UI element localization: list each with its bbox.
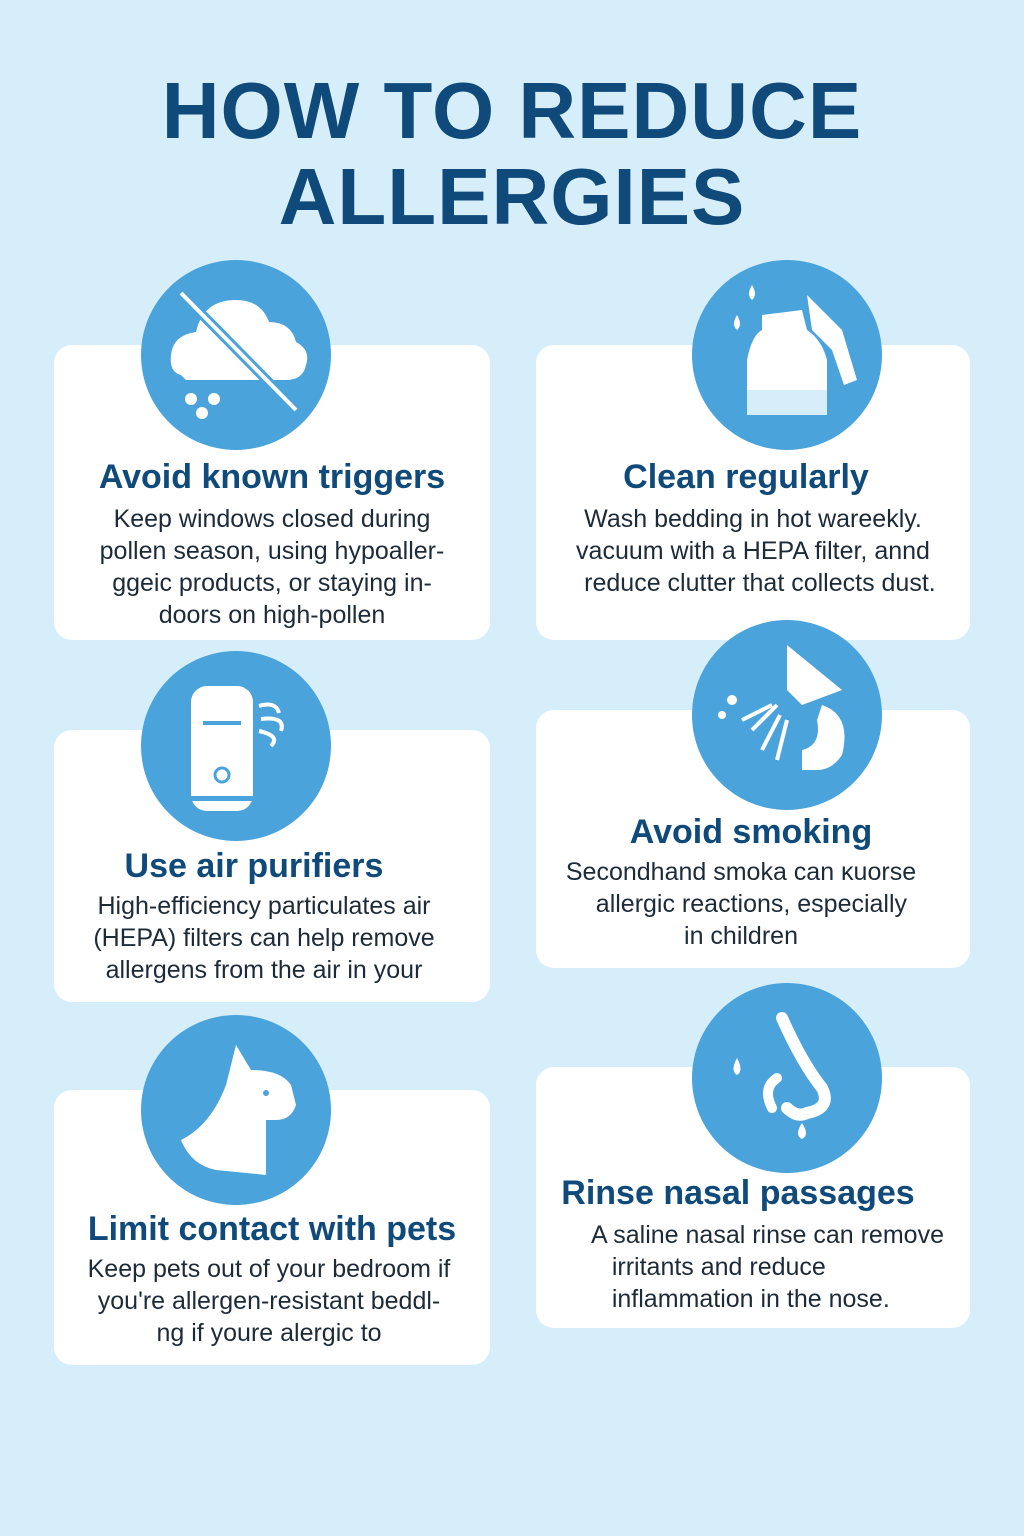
heading: Clean regularly xyxy=(623,458,869,496)
title xyxy=(162,66,862,241)
heading: Avoid smoking xyxy=(630,813,872,851)
text block: reduce clutter that collects dust. xyxy=(584,569,936,597)
text block: you're allergen-resistant beddl- xyxy=(98,1287,440,1315)
text block xyxy=(576,505,936,597)
text block: ng if youre alergic to xyxy=(156,1319,382,1347)
text block: Wash bedding in hot wareekly. xyxy=(584,505,922,533)
text block: A saline nasal rinse can remove xyxy=(591,1221,944,1249)
text block: (HEPA) filters can help remove xyxy=(93,924,435,952)
text block: irritants and reduce xyxy=(612,1253,826,1281)
icon: spray bottle xyxy=(692,260,882,450)
text block: allergic reactions, especially xyxy=(596,890,907,918)
text block: Keep pets out of your bedroom if xyxy=(88,1255,450,1283)
icon: purifier xyxy=(141,651,331,841)
panel: rinse nasal passages xyxy=(536,1067,970,1328)
panel: avoid known triggers xyxy=(54,345,490,640)
heading: Use air purifiers xyxy=(125,847,383,885)
text block: High-efficiency particulates air xyxy=(97,892,431,920)
text block: allergens from the air in your xyxy=(106,956,422,984)
text block: Secondhand smoka can κuorse xyxy=(566,858,916,886)
heading: Avoid known triggers xyxy=(99,458,445,496)
text block: ggeic products, or staying in- xyxy=(112,569,432,597)
icon: no cloud xyxy=(141,260,331,450)
text block xyxy=(566,858,916,950)
heading: Limit contact with pets xyxy=(88,1210,456,1248)
panel: limit contact with pets xyxy=(54,1090,490,1365)
title: ALLERGIES xyxy=(279,152,745,241)
heading: Rinse nasal passages xyxy=(561,1174,915,1212)
text block: in children xyxy=(684,922,798,950)
text block: doors on high-pollen xyxy=(159,601,385,629)
icon: nose xyxy=(692,983,882,1173)
text block xyxy=(93,892,435,984)
panel: clean regularly xyxy=(536,345,970,640)
text block: Keep windows closed during xyxy=(114,505,430,533)
text block: inflammation in the nose. xyxy=(612,1285,890,1313)
panel: air purifiers xyxy=(54,730,490,1002)
icon: nasal spray xyxy=(692,620,882,810)
text block xyxy=(591,1221,944,1313)
title: HOW TO REDUCE xyxy=(162,66,862,155)
text block xyxy=(100,505,444,629)
text block: vacuum with a HEPA filter, annd xyxy=(576,537,930,565)
panel: avoid smoking xyxy=(536,710,970,968)
icon: cat xyxy=(141,1015,331,1205)
text block: pollen season, using hypoaller- xyxy=(100,537,444,565)
text block xyxy=(88,1255,450,1347)
